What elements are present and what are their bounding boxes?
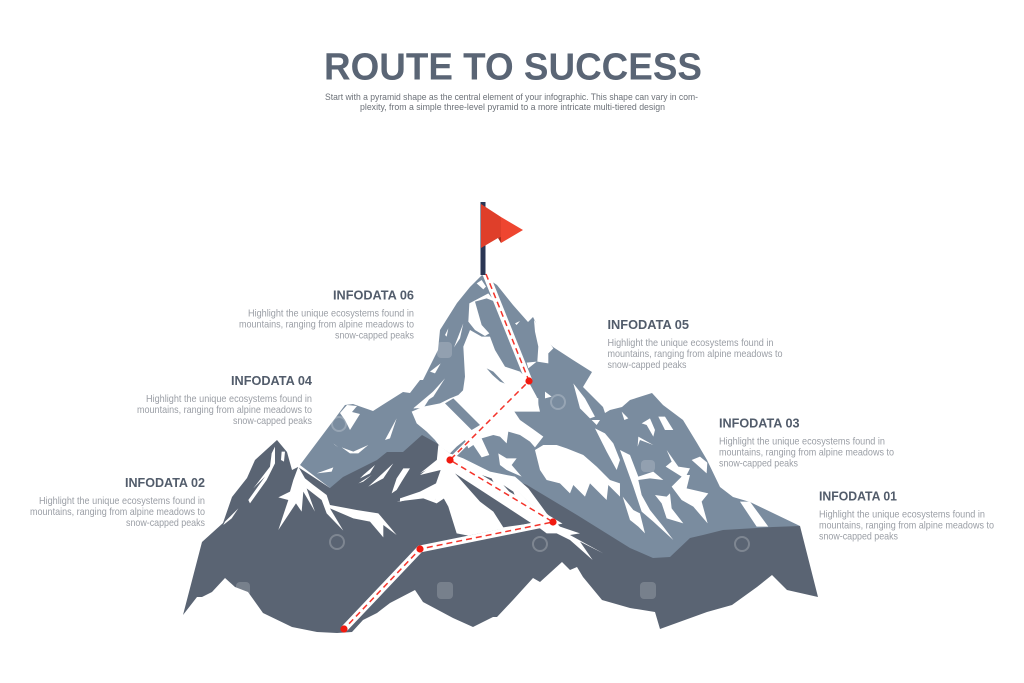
route path — [340, 274, 557, 633]
route stop 2 — [416, 545, 424, 553]
subtitle — [325, 92, 698, 112]
INFODATA 01: Highlight the unique ecosystems found in — [819, 510, 985, 520]
INFODATA 03: INFODATA 03 — [719, 416, 800, 430]
INFODATA 04: INFODATA 04 — [231, 374, 312, 388]
INFODATA 02: INFODATA 02 — [125, 476, 205, 490]
INFODATA 06: INFODATA 06 — [333, 288, 414, 302]
INFODATA 02: mountains, ranging from alpine meadows to — [30, 507, 205, 518]
snow: summit — [413, 280, 553, 412]
INFODATA 01: mountains, ranging from alpine meadows to — [819, 520, 994, 532]
INFODATA 03: mountains, ranging from alpine meadows to — [719, 448, 894, 458]
snow: right slope — [545, 383, 768, 540]
INFODATA 05: INFODATA 05 — [608, 318, 689, 332]
watermarks — [236, 342, 749, 599]
front mountain — [183, 435, 818, 633]
subtitle: Start with a pyramid shape as the central element of your infographic. This shape can vary in com- — [325, 92, 698, 102]
snow: centre ridge — [400, 370, 620, 560]
subtitle: plexity, from a simple three-level pyramid to a more intricate multi-tiered design — [360, 102, 665, 112]
INFODATA 01 — [819, 490, 994, 542]
INFODATA 05 — [608, 318, 783, 371]
flag on summit — [480, 202, 523, 275]
route stop 3 — [549, 518, 557, 526]
route stop 4 — [446, 456, 454, 464]
INFODATA 01: INFODATA 01 — [819, 490, 897, 504]
INFODATA 04 — [137, 374, 312, 427]
INFODATA 02: Highlight the unique ecosystems found in — [39, 496, 205, 507]
snow: left peak and ridge — [223, 418, 457, 537]
snow: left shoulder — [340, 405, 360, 430]
INFODATA 06 — [239, 288, 414, 342]
INFODATA 05: mountains, ranging from alpine meadows to — [608, 349, 783, 360]
title: ROUTE TO SUCCESS — [324, 46, 702, 88]
INFODATA 06: snow-capped peaks — [335, 330, 414, 342]
mountain illustration — [183, 275, 818, 633]
back mountain — [300, 275, 800, 575]
INFODATA 04: mountains, ranging from alpine meadows to — [137, 405, 312, 416]
INFODATA 05: Highlight the unique ecosystems found in — [608, 338, 774, 349]
INFODATA 03: snow-capped peaks — [719, 458, 798, 470]
INFODATA 04: Highlight the unique ecosystems found in — [146, 394, 312, 405]
INFODATA 03 — [719, 416, 894, 470]
INFODATA 06: Highlight the unique ecosystems found in — [248, 308, 414, 320]
INFODATA 05: snow-capped peaks — [608, 360, 686, 371]
INFODATA 01: snow-capped peaks — [819, 532, 898, 542]
INFODATA 02 — [30, 476, 205, 529]
INFODATA 03: Highlight the unique ecosystems found in — [719, 436, 885, 448]
INFODATA 06: mountains, ranging from alpine meadows to — [239, 320, 414, 330]
INFODATA 02: snow-capped peaks — [126, 518, 205, 529]
INFODATA 04: snow-capped peaks — [233, 416, 312, 427]
route stop 5 — [525, 377, 533, 385]
route stop 1 — [340, 625, 348, 633]
